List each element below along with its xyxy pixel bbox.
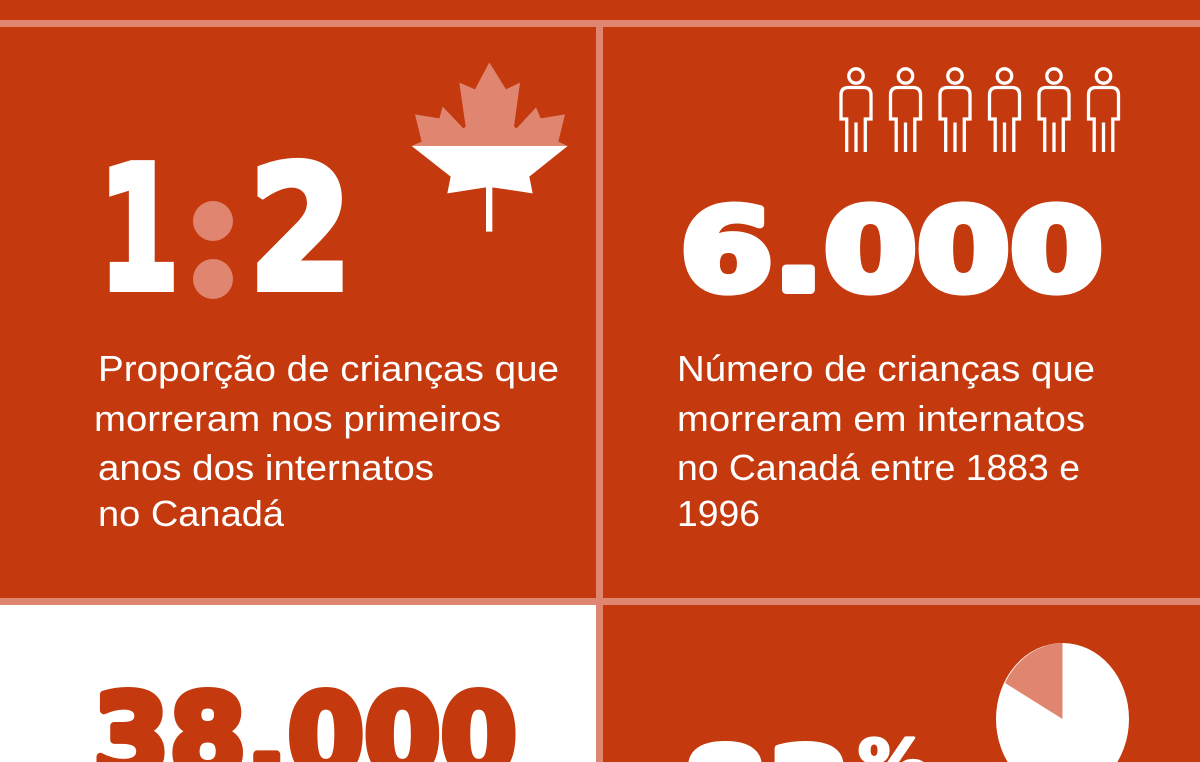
statistic: 1:2: [99, 131, 352, 329]
icon: person 3: [940, 69, 970, 152]
panel: 83 percent: [683, 643, 1129, 762]
text: number description: Número de crianças que: [677, 348, 1095, 389]
panel: one in two children: [94, 62, 568, 534]
text: number description: morreram em internatos: [677, 398, 1085, 439]
text: number description: no Canadá entre 1883 e: [677, 447, 1080, 488]
panel: six thousand children: [677, 69, 1118, 534]
text: proportion description: morreram nos primeiros: [94, 398, 501, 439]
text: proportion description: no Canadá: [98, 493, 285, 534]
icon: person 4: [990, 69, 1020, 152]
panel: white 38.000: [0, 605, 596, 762]
icon: person 5: [1039, 69, 1069, 152]
statistic: 83%: [683, 724, 929, 762]
icon: person 1: [841, 69, 871, 152]
statistic: 1:2: 2: [249, 131, 352, 329]
text: number description: [677, 348, 1095, 534]
statistic: 6.000: 6.000: [680, 184, 1103, 317]
text: proportion description: Proporção de crianças que: [98, 348, 559, 389]
statistic: 1:2: 1: [99, 131, 179, 329]
icon: row of six people: [841, 69, 1118, 152]
text: proportion description: [94, 348, 559, 534]
text: number description: 1996: [677, 493, 760, 534]
chart: pie: [996, 643, 1129, 762]
icon: person 6: [1088, 69, 1118, 152]
icon: person 2: [890, 69, 920, 152]
text: proportion description: anos dos internatos: [98, 447, 434, 488]
icon: maple leaf: [412, 62, 568, 232]
